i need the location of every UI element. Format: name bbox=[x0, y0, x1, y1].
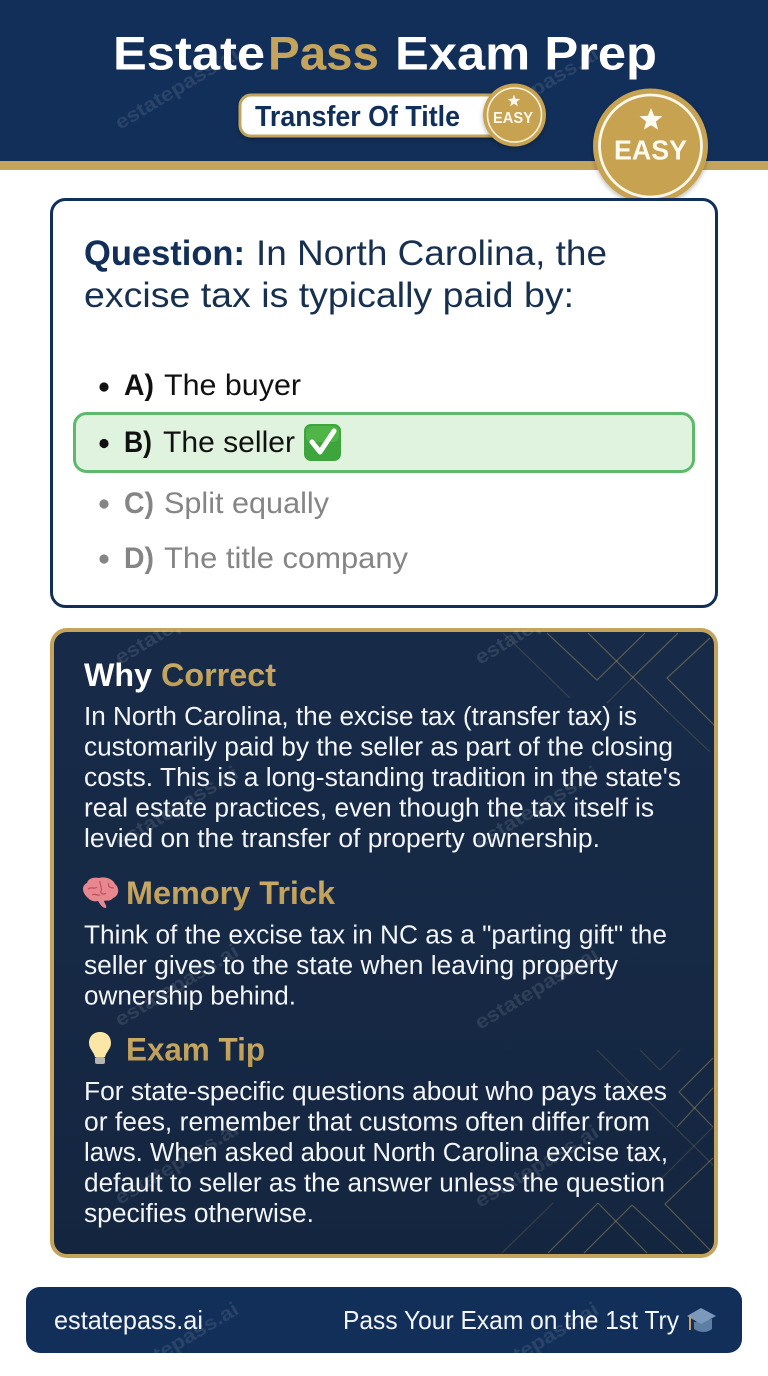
panel watermarks: estatepass.ai bbox=[111, 578, 243, 669]
text block: memory trick bbox=[84, 922, 667, 1010]
panel watermarks: estatepass.ai bbox=[111, 1118, 243, 1209]
header watermarks: estatepass.ai bbox=[471, 43, 603, 134]
option B correct answer: B) bbox=[124, 426, 152, 459]
panel watermarks: estatepass.ai bbox=[111, 940, 243, 1031]
header band bbox=[0, 0, 768, 170]
panel watermarks: estatepass.ai bbox=[471, 1121, 603, 1212]
heading: memory trick: Memory Trick bbox=[126, 875, 335, 911]
question text bbox=[84, 234, 607, 315]
question text: excise tax is typically paid by: bbox=[84, 276, 574, 315]
icon: graduation cap bbox=[687, 1308, 716, 1332]
footer bar bbox=[26, 1287, 742, 1353]
icon: light bulb bbox=[89, 1032, 111, 1064]
text block: memory trick: seller gives to the state when leaving property bbox=[84, 952, 618, 980]
title: Exam Prep bbox=[395, 26, 657, 80]
large easy badge: EASY bbox=[614, 134, 687, 166]
text block: why correct: levied on the transfer of property ownership. bbox=[84, 825, 600, 853]
text block: exam tip bbox=[84, 1078, 668, 1228]
panel: explanation bbox=[52, 578, 716, 1256]
text block: memory trick: Think of the excise tax in NC as a "parting gift" the bbox=[84, 922, 667, 950]
heading: why correct: Correct bbox=[161, 657, 276, 693]
text block: exam tip: For state-specific questions about who pays taxes bbox=[84, 1078, 667, 1106]
heading: why correct bbox=[84, 657, 276, 693]
text block: exam tip: specifies otherwise. bbox=[84, 1200, 314, 1228]
question text: In North Carolina, the bbox=[256, 234, 607, 273]
option A: A) bbox=[124, 369, 154, 402]
small easy badge bbox=[483, 84, 546, 146]
footer url: estatepass.ai bbox=[54, 1305, 203, 1335]
panel: question card bbox=[52, 200, 716, 606]
text block: memory trick: ownership behind. bbox=[84, 982, 296, 1010]
large easy badge bbox=[593, 88, 708, 204]
text block: exam tip: laws. When asked about North Carolina excise tax, bbox=[84, 1139, 668, 1167]
option D: D) bbox=[124, 542, 154, 575]
topic label: Transfer Of Title bbox=[255, 101, 460, 133]
option C: Split equally bbox=[164, 487, 329, 520]
option B correct answer bbox=[74, 414, 694, 472]
text block: why correct: In North Carolina, the excise tax (transfer tax) is bbox=[84, 703, 637, 731]
option B correct answer: The seller bbox=[163, 426, 295, 459]
panel watermarks: estatepass.ai bbox=[471, 762, 603, 853]
footer tagline: Pass Your Exam on the 1st Try bbox=[343, 1305, 679, 1335]
topic pill bbox=[240, 95, 510, 136]
option C bbox=[99, 487, 329, 520]
option A bbox=[99, 369, 301, 402]
panel watermarks: estatepass.ai bbox=[111, 762, 243, 853]
header watermarks: estatepass.ai bbox=[111, 43, 243, 134]
text block: exam tip: or fees, remember that customs often differ from bbox=[84, 1108, 650, 1136]
option D: The title company bbox=[164, 542, 408, 575]
question text: Question: bbox=[84, 234, 245, 273]
heading: why correct: Why bbox=[84, 657, 152, 693]
icon: brain bbox=[83, 877, 118, 908]
text block: why correct: customarily paid by the seller as part of the closing bbox=[84, 734, 673, 762]
panel watermarks: estatepass.ai bbox=[471, 578, 603, 669]
geometric line pattern bbox=[502, 633, 715, 1253]
text block: why correct bbox=[84, 703, 681, 853]
heading: exam tip: Exam Tip bbox=[126, 1032, 265, 1068]
title: Pass bbox=[268, 26, 379, 80]
title bbox=[113, 26, 657, 80]
text block: why correct: costs. This is a long-standing tradition in the state's bbox=[84, 764, 681, 792]
footer watermarks bbox=[153, 1302, 598, 1353]
header watermarks bbox=[111, 43, 603, 134]
small easy badge: EASY bbox=[493, 110, 533, 127]
title: Estate bbox=[113, 26, 265, 80]
text block: exam tip: default to seller as the answer unless the question bbox=[84, 1170, 665, 1198]
icon: check mark bbox=[304, 424, 341, 461]
text block: why correct: real estate practices, even though the tax itself is bbox=[84, 794, 654, 822]
option C: C) bbox=[124, 487, 154, 520]
option A: The buyer bbox=[164, 369, 301, 402]
panel watermarks bbox=[111, 578, 603, 1212]
panel watermarks: estatepass.ai bbox=[471, 943, 603, 1034]
